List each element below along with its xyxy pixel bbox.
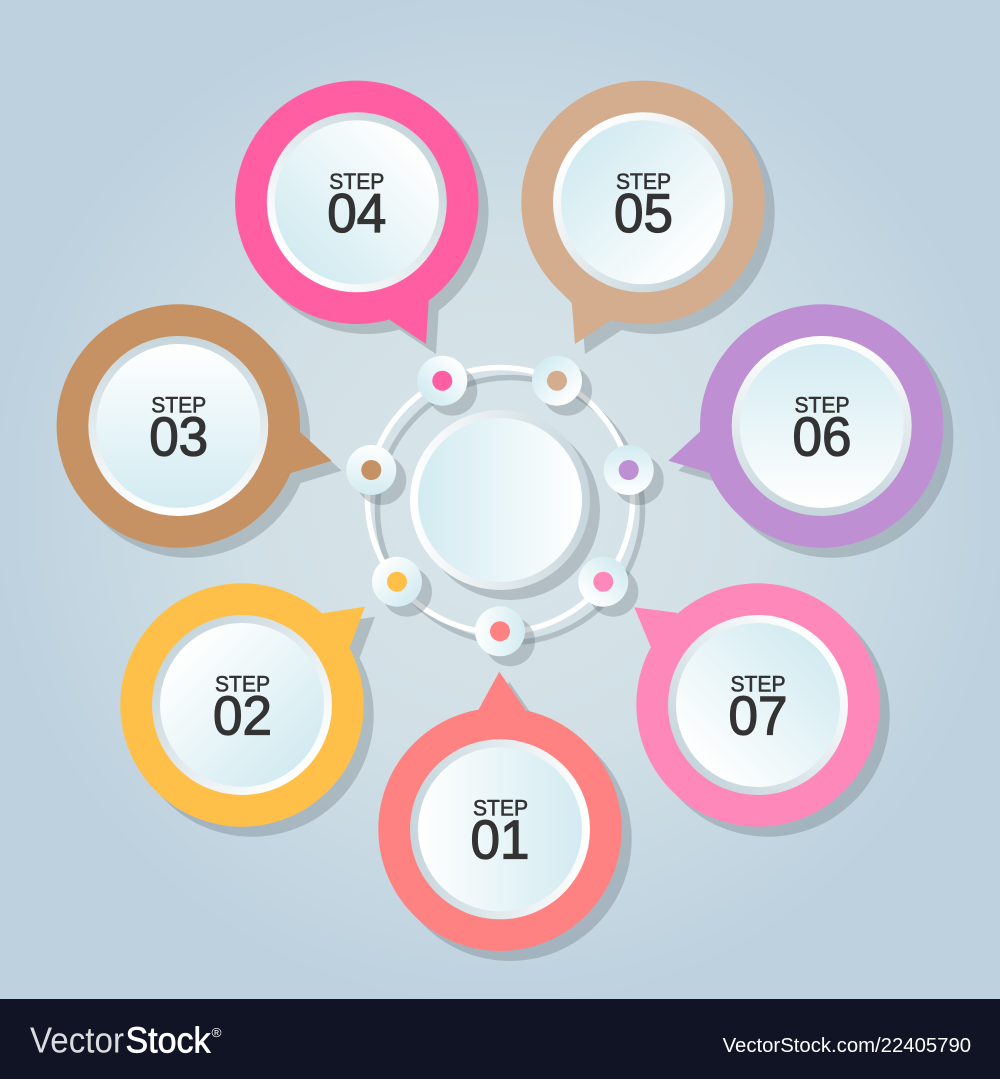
- step 07 callout: 07: [728, 685, 788, 747]
- footer logo: Vector: [30, 1020, 124, 1061]
- step 03 callout: 03: [149, 406, 208, 468]
- node 04: [417, 356, 477, 416]
- footer image id: VectorStock.com/22405790: [723, 1035, 971, 1057]
- step 06 callout: [668, 304, 953, 558]
- step 03 callout: STEP: [151, 393, 206, 418]
- footer logo: ®: [212, 1025, 222, 1040]
- node 07: [578, 557, 638, 617]
- step 07 callout: [634, 583, 890, 837]
- footer logo: Stock: [126, 1020, 211, 1061]
- node 02: [372, 557, 432, 617]
- step 05 callout: STEP: [616, 169, 671, 194]
- node 03: [346, 445, 406, 505]
- node 06: [604, 445, 664, 505]
- step 02 callout: 02: [213, 685, 272, 747]
- step 04 callout: [235, 81, 488, 354]
- step 05 callout: [521, 81, 775, 354]
- step 07 callout: STEP: [730, 672, 786, 697]
- step 03 callout: [57, 304, 342, 558]
- step 04 callout: 04: [327, 182, 386, 244]
- central hub: [368, 368, 642, 642]
- step 01 callout: STEP: [473, 796, 528, 821]
- step 04 callout: STEP: [329, 169, 384, 194]
- footer logo: [30, 1020, 222, 1061]
- step 02 callout: [120, 583, 375, 837]
- node 05: [532, 356, 592, 416]
- step 05 callout: 05: [614, 182, 673, 244]
- step 06 callout: 06: [792, 406, 852, 468]
- step 01 callout: [378, 672, 632, 961]
- footer bar: [0, 999, 1000, 1079]
- step 01 callout: 01: [470, 809, 530, 871]
- step 06 callout: STEP: [794, 393, 850, 418]
- node 01: [475, 606, 535, 666]
- step 02 callout: STEP: [215, 672, 270, 697]
